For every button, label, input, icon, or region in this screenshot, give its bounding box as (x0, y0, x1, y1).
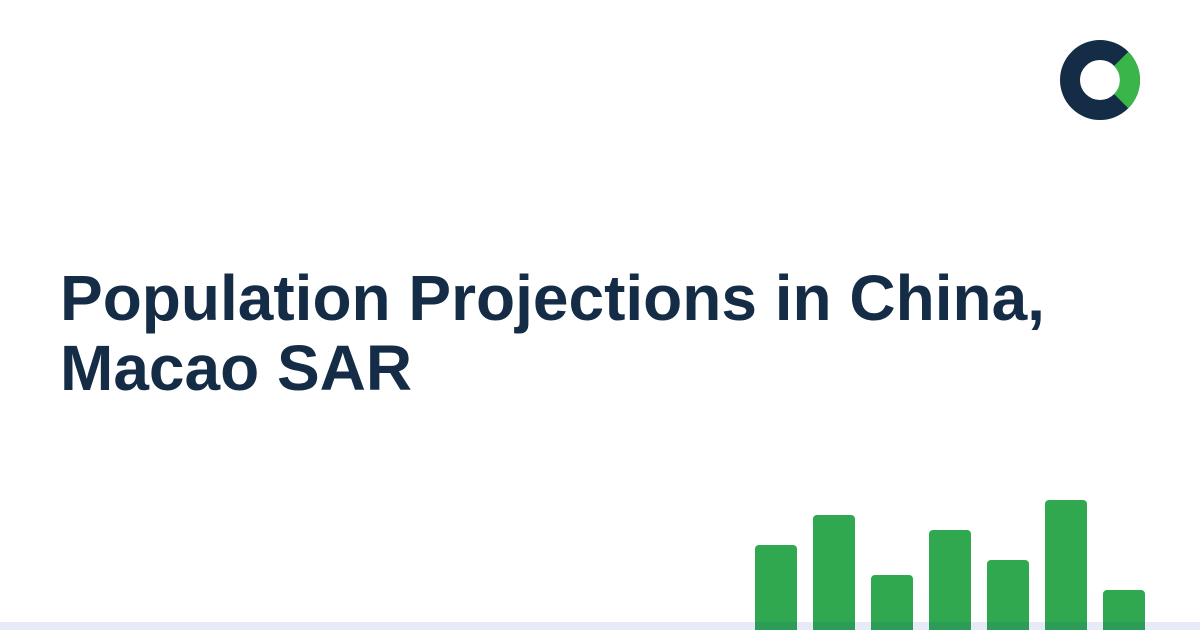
title: Population Projections in China, (60, 262, 1045, 334)
bar chart (755, 500, 1145, 630)
title: Macao SAR (60, 332, 412, 404)
icon: donut logo (1060, 40, 1140, 120)
title (60, 262, 1045, 404)
